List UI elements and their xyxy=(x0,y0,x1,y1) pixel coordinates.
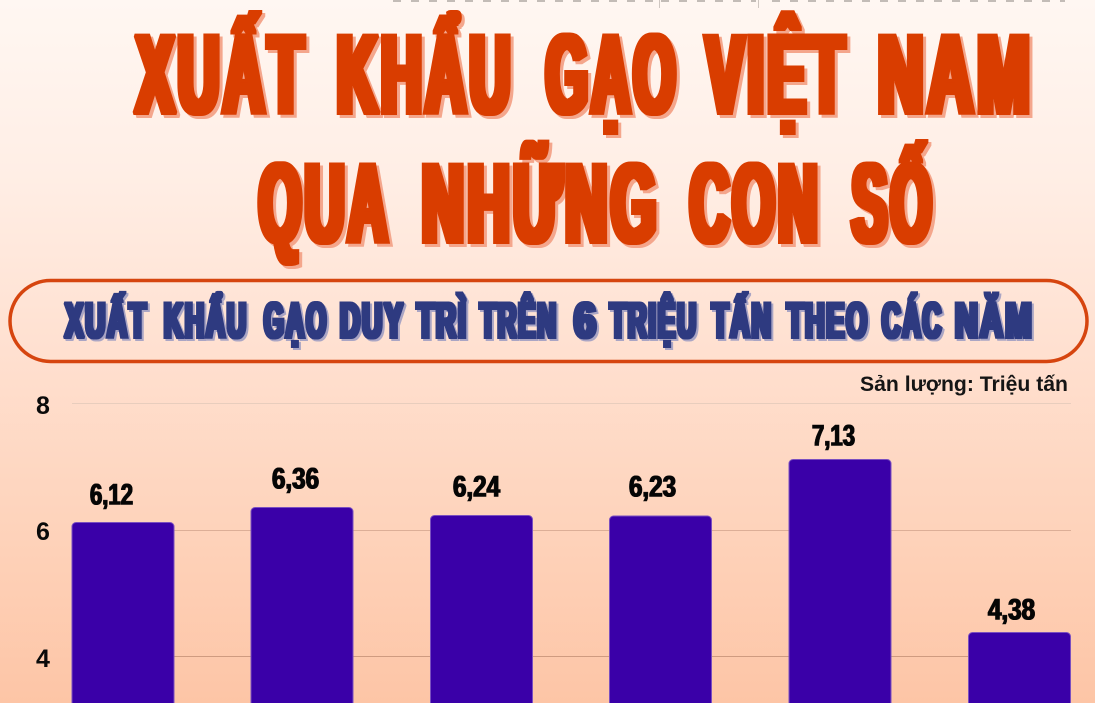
bar chart xyxy=(36,392,1071,703)
subtitle text: TẤN xyxy=(712,292,773,348)
title line 2: NHỮNG xyxy=(422,141,660,266)
subtitle text: GẠO xyxy=(264,292,328,348)
title line 2 xyxy=(259,141,935,266)
subtitle pill xyxy=(10,280,1087,362)
title line 2: CON xyxy=(690,141,821,266)
title line 1 xyxy=(136,12,1034,137)
value labels: 6,23 xyxy=(629,470,676,504)
y axis labels: 6 xyxy=(36,518,50,546)
title line 1: XUẤT xyxy=(136,12,307,137)
subtitle text: XUẤT xyxy=(65,292,148,348)
gridlines xyxy=(72,404,1071,656)
title: SỐ xyxy=(852,141,935,266)
value labels: 6,24 xyxy=(453,470,500,504)
subtitle text: TRÊN xyxy=(480,292,558,348)
value labels: 7,13 xyxy=(812,420,855,452)
subtitle text: THEO xyxy=(787,292,869,348)
value labels xyxy=(90,420,1035,626)
title line 1: KHẨU xyxy=(337,12,514,137)
value labels: 6,36 xyxy=(272,462,319,496)
subtitle text: DUY xyxy=(340,292,405,348)
subtitle text: 6 xyxy=(574,292,599,348)
subtitle text: NĂM xyxy=(955,292,1034,348)
subtitle text xyxy=(65,292,1034,348)
unit label: Sản lượng: Triệu tấn xyxy=(860,373,1068,396)
subtitle text: CÁC xyxy=(882,292,943,348)
value labels: 4,38 xyxy=(988,594,1035,626)
cropped header strip xyxy=(393,0,1065,8)
value labels: 6,12 xyxy=(90,478,133,512)
y axis labels xyxy=(36,392,50,673)
subtitle text: KHẨU xyxy=(164,292,248,348)
y axis labels: 8 xyxy=(36,392,50,420)
subtitle text: TRIỆU xyxy=(610,292,698,348)
title xyxy=(136,12,1034,266)
y axis labels: 4 xyxy=(36,645,50,673)
title line 2: QUA xyxy=(259,141,391,266)
bars xyxy=(72,460,1070,703)
title line 1: VIỆT xyxy=(706,12,848,137)
subtitle text: TRÌ xyxy=(417,292,468,348)
title line 1: GẠO xyxy=(546,12,679,137)
